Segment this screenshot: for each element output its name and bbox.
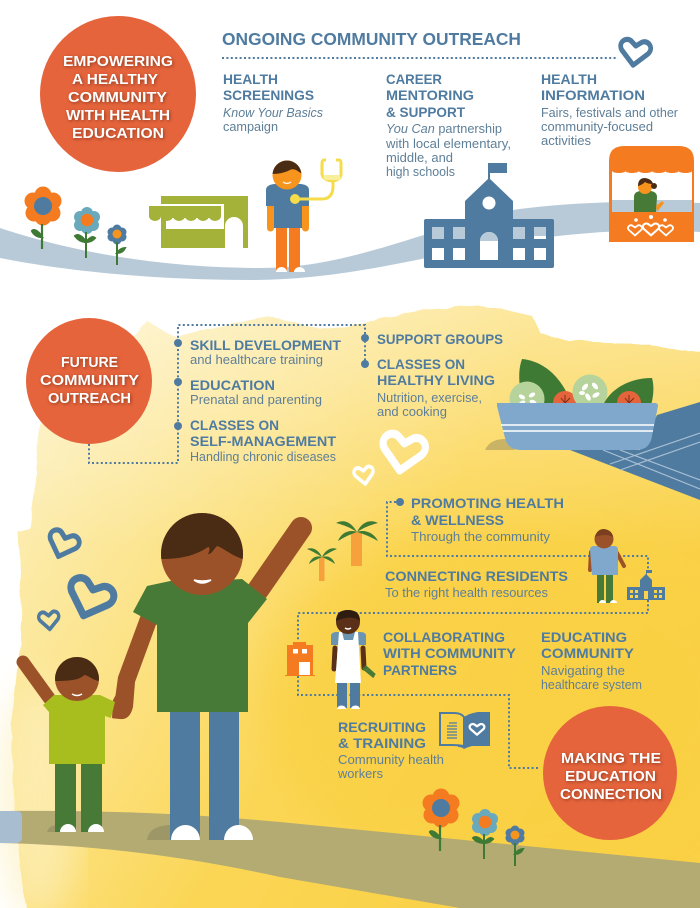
text block: health screenings: campaign: [223, 120, 278, 134]
text block: education: EDUCATION: [190, 377, 275, 393]
text block: recruiting: workers: [337, 767, 383, 781]
icon: small school: [627, 570, 665, 600]
text block: health information: activities: [541, 134, 591, 148]
icon: health fair stall: [609, 146, 694, 242]
text block: health information: [541, 71, 678, 148]
text block: promoting health: & WELLNESS: [411, 512, 504, 528]
text block: recruiting: [337, 719, 444, 781]
text block: recruiting: Community health: [338, 753, 444, 767]
text block: classes on healthy living: and cooking: [377, 405, 447, 419]
text block: recruiting: & TRAINING: [338, 735, 426, 751]
dotted connector: promoting to education: [298, 502, 648, 768]
icon: flowers bottom: [422, 788, 524, 866]
top ground band: [0, 202, 700, 280]
text block: classes on healthy living: Nutrition, exercise,: [377, 391, 482, 405]
text block: education: [190, 377, 322, 407]
text block: connecting residents: [385, 568, 568, 600]
text block: career mentoring: MENTORING: [386, 87, 474, 103]
heading: ongoing community outreach: ONGOING COMMUNITY OUTREACH: [222, 29, 521, 49]
text block: connecting residents: CONNECTING RESIDENTS: [385, 568, 568, 584]
text block: skill development: and healthcare training: [190, 353, 323, 367]
circle: making the education connection: MAKING THE: [561, 750, 661, 767]
icon: white hearts: [353, 432, 427, 485]
circle: making the education connection: EDUCATION: [565, 768, 656, 785]
text block: educating community: COMMUNITY: [541, 645, 635, 661]
text block: education: Prenatal and parenting: [190, 393, 322, 407]
text block: classes on self-management: SELF-MANAGEMENT: [190, 433, 336, 449]
text block: career mentoring: high schools: [386, 165, 455, 179]
text block: career mentoring: & SUPPORT: [386, 104, 465, 120]
icon: flowers top: [24, 186, 126, 265]
text block: classes on healthy living: [377, 356, 495, 419]
text block: health information: Fairs, festivals and other: [541, 106, 678, 120]
watercolor yellow background: [0, 305, 700, 908]
text block: educating community: Navigating the: [541, 664, 625, 678]
icon: open book: [440, 712, 490, 749]
title circle: [40, 16, 196, 172]
text block: connecting residents: To the right health resources: [385, 586, 548, 600]
text block: career mentoring: CAREER: [386, 71, 442, 87]
text block: collaborating: [383, 629, 517, 678]
text block: classes on self-management: Handling chronic diseases: [190, 450, 336, 464]
icon: road shape: [570, 402, 700, 500]
icon: salad bowl: [485, 359, 658, 450]
text block: career mentoring: with local elementary,: [385, 137, 511, 151]
icon: woman with apron: [331, 610, 375, 709]
text block: promoting health: [411, 495, 564, 544]
text block: educating community: [541, 629, 642, 692]
text block: collaborating: WITH COMMUNITY: [383, 645, 517, 661]
text block: promoting health: Through the community: [411, 530, 551, 544]
bullets: [174, 334, 404, 506]
title text: A HEALTHY: [72, 71, 158, 88]
text block: collaborating: COLLABORATING: [383, 629, 505, 645]
dotted connector: future outreach: [89, 325, 365, 463]
icon: palm trees: [307, 521, 378, 581]
text block: health screenings: [223, 71, 323, 134]
text block: career mentoring: [385, 71, 511, 179]
text block: classes on healthy living: CLASSES ON: [377, 356, 465, 372]
text block: collaborating: PARTNERS: [383, 662, 457, 678]
circle: making the education connection: [543, 706, 677, 840]
title text: WITH HEALTH: [66, 107, 170, 124]
icon: person in light blue: [590, 529, 624, 603]
icon: blue hearts: [38, 528, 117, 630]
circle: future community outreach: COMMUNITY: [40, 372, 139, 389]
title text: COMMUNITY: [68, 89, 167, 106]
text block: skill development: [190, 337, 341, 367]
text block: health screenings: SCREENINGS: [223, 87, 314, 103]
icon: stall hearts: [628, 215, 673, 235]
circle: future community outreach: FUTURE: [61, 354, 118, 371]
bottom ground band: [0, 811, 700, 908]
figure: adult waving: [113, 513, 301, 840]
figure: child waving: [23, 657, 128, 832]
text block: educating community: healthcare system: [541, 678, 642, 692]
icon: shop: [149, 196, 248, 248]
title text: EMPOWERING: [63, 53, 173, 70]
text block: health information: INFORMATION: [541, 87, 645, 103]
text block: health information: community-focused: [541, 120, 653, 134]
text block: classes on self-management: [190, 417, 336, 464]
text block: support groups: SUPPORT GROUPS: [377, 331, 503, 347]
text block: health information: HEALTH: [541, 71, 597, 87]
circle: future community outreach: [26, 318, 152, 444]
text block: career mentoring: You Can partnership: [386, 122, 502, 136]
text block: health screenings: Know Your Basics: [223, 106, 323, 120]
text block: career mentoring: middle, and: [386, 151, 453, 165]
title text: [63, 53, 173, 142]
icon: health worker with stethoscope: [266, 160, 341, 272]
text block: health screenings: HEALTH: [223, 71, 278, 87]
circle: making the education connection: CONNECTION: [560, 786, 662, 803]
text block: promoting health: PROMOTING HEALTH: [411, 495, 564, 511]
circle: future community outreach: OUTREACH: [48, 390, 131, 407]
text block: educating community: EDUCATING: [541, 629, 627, 645]
icon: school: [424, 163, 554, 268]
icon: heart on heading line: [618, 39, 652, 67]
title text: EDUCATION: [72, 125, 164, 142]
text block: skill development: SKILL DEVELOPMENT: [190, 337, 341, 353]
icon: orange hotel building: [285, 642, 315, 676]
text block: classes on self-management: CLASSES ON: [190, 417, 279, 433]
text block: recruiting: RECRUITING: [338, 719, 426, 735]
text block: classes on healthy living: HEALTHY LIVING: [377, 372, 495, 388]
